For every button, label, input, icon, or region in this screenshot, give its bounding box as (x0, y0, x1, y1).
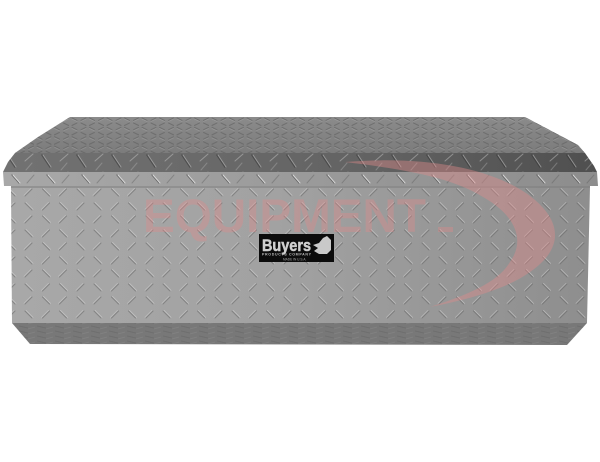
lid top panel (15, 117, 585, 153)
made in label: MADE IN U.S.A. (283, 258, 306, 262)
brand badge (259, 234, 334, 262)
watermark dash (438, 227, 453, 232)
watermark: equipment wordmark and swoosh (143, 160, 555, 307)
angled base panel (12, 323, 587, 345)
brand sub-line: PRODUCTS COMPANY (262, 252, 312, 256)
watermark swoosh (345, 160, 555, 307)
icon: bulldog mascot (313, 236, 331, 254)
box front body (11, 186, 590, 323)
brand name: Buyers (262, 237, 311, 255)
watermark word: EQUIPMENT (143, 189, 426, 242)
lid front band (3, 153, 597, 172)
lid lip (3, 172, 598, 187)
